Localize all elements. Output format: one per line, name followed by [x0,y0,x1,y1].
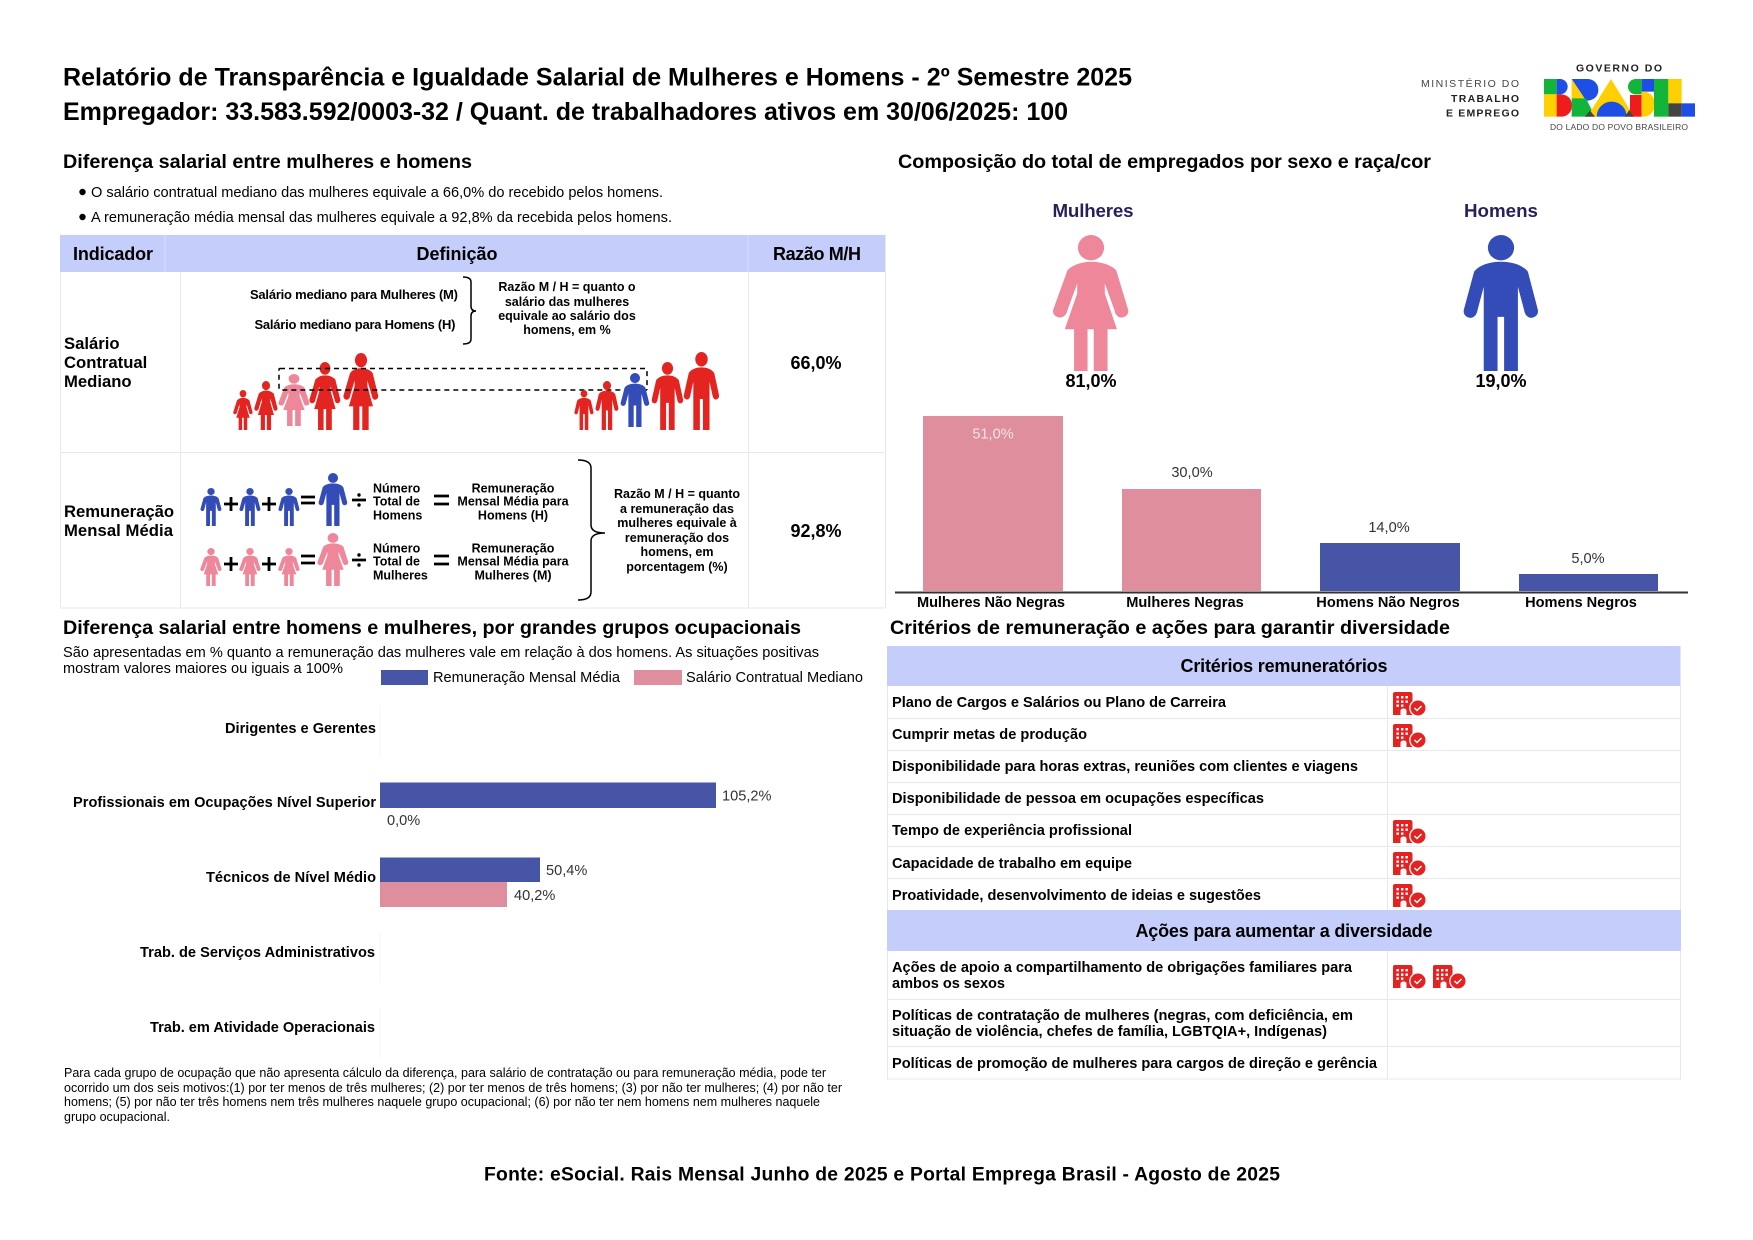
criteria rows: Proatividade, desenvolvimento de ideias e sugestões [892,888,1261,904]
bar chart: grupos ocupacionais: Trab. em Atividade Operacionais [150,1020,375,1036]
chart description [63,645,819,677]
icons: company applies criterion [1393,692,1427,909]
bar chart: grupos ocupacionais [73,705,771,1058]
bar chart: composição por raça/cor: 51,0% [972,426,1014,442]
row label: Mensal Média [64,521,174,540]
panel: men share: Homens [1464,200,1538,221]
panel: women share: Mulheres [1052,200,1134,221]
bar chart: grupos ocupacionais: Trab. de Serviços Administrativos [140,945,375,961]
ratio explanation: equivale ao salário dos [498,309,636,323]
ratio explanation [614,487,740,574]
title: Empregador: 33.583.592/0003-32 / Quant. de trabalhadores ativos em 30/06/2025: 100 [63,98,1068,126]
table header: Definição [416,244,498,264]
bar chart: composição por raça/cor: 5,0% [1571,551,1605,567]
ratio explanation: Razão M / H = quanto o [498,280,636,294]
row label: Remuneração [64,502,174,521]
formula: women: Número [373,542,421,556]
title: Relatório de Transparência e Igualdade Salarial de Mulheres e Homens - 2º Semestre 2025 [63,64,1132,92]
criteria rows: Disponibilidade para horas extras, reuniões com clientes e viagens [892,759,1358,775]
logo: Governo do Brasil: GOVERNO DO [1576,62,1662,74]
action rows: situação de violência, chefes de família, LGBTQIA+, Indígenas) [892,1024,1327,1040]
formula: women: Remuneração [472,542,555,556]
panel: women share [1052,200,1134,391]
panel: women share: 81,0% [1065,371,1117,391]
table: indicadores [60,235,886,608]
bar chart: composição por raça/cor: Homens Negros [1525,595,1637,611]
icon: men ordered by salary [574,352,719,430]
ratio explanation: remuneração dos [625,531,729,545]
criteria rows [892,695,1358,904]
formula: women: Total de [373,554,420,568]
bullet list: summary: A remuneração média mensal das mulheres equivale a 92,8% da recebida pelos homens. [91,210,672,226]
ratio explanation: homens, em % [523,323,611,337]
table header: Indicador [73,244,153,264]
formula: men: Número [373,482,421,496]
formula: women: Mulheres [373,568,428,582]
heading: diferença salarial: Diferença salarial entre mulheres e homens [63,151,472,173]
bullet list: summary: O salário contratual mediano das mulheres equivale a 66,0% do recebido pelos homens. [91,185,663,201]
definition labels: Salário mediano para Homens (H) [254,317,456,332]
footnote: grupo ocupacional. [64,1110,170,1124]
row label [64,502,174,540]
panel: men share: 19,0% [1475,371,1527,391]
section header: critérios remuneratórios [887,646,1681,686]
formula: women: Mensal Média para [457,554,570,568]
bar chart: grupos ocupacionais: 40,2% [514,888,555,904]
median dashed box [279,368,647,390]
logo: Ministério do Trabalho e Emprego: E EMPREGO [1446,108,1519,120]
title [63,64,1132,126]
ratio explanation: homens, em [641,545,713,559]
row: remuneração mensal média [64,460,842,600]
ratio explanation: salário das mulheres [505,295,629,309]
logo: Governo do Brasil: DO LADO DO POVO BRASILEIRO [1550,122,1688,132]
brace [578,460,605,600]
brace [463,277,476,344]
bar chart: composição por raça/cor: 30,0% [1171,465,1213,481]
legend: Salário Contratual Mediano [686,670,863,686]
bar chart: grupos ocupacionais: Profissionais em Ocupações Nível Superior [73,795,376,811]
bar chart: composição por raça/cor: Mulheres Não Negras [917,595,1065,611]
icon: women ordered by salary [233,353,378,430]
action rows: Políticas de promoção de mulheres para cargos de direção e gerência [892,1056,1378,1072]
row: salário contratual mediano [64,277,842,430]
table header: Razão M/H [773,244,861,264]
formula: men: Mensal Média para [457,494,570,508]
footnote [64,1066,842,1124]
criteria rows: Plano de Cargos e Salários ou Plano de Carreira [892,695,1227,711]
chart description: São apresentadas em % quanto a remuneração das mulheres vale em relação à dos homens. As situações positivas [63,645,819,661]
bar chart: grupos ocupacionais: Técnicos de Nível Médio [206,870,376,886]
ratio explanation: a remuneração das [620,502,734,516]
action rows: Políticas de contratação de mulheres (negras, com deficiência, em [892,1008,1353,1024]
ratio explanation: Razão M / H = quanto [614,487,740,501]
action rows: ambos os sexos [892,976,1005,992]
icon: man [1464,235,1538,371]
logo: Ministério do Trabalho e Emprego [1421,77,1519,120]
criteria rows: Tempo de experiência profissional [892,823,1132,839]
bar chart: composição por raça/cor: 14,0% [1368,520,1410,536]
icon: woman [1053,235,1128,371]
legend [381,670,863,686]
formula: men: Homens (H) [478,508,548,522]
footnote: ocorrido um dos seis motivos:(1) por ter menos de três mulheres; (2) por ter menos de três homens; (3) por não ter mulheres; (4) por não ter [64,1081,842,1095]
ratio value: 92,8% [790,521,842,541]
bar chart: grupos ocupacionais: 50,4% [546,863,587,879]
bar chart: grupos ocupacionais: Dirigentes e Gerentes [225,721,376,737]
table: critérios e ações [887,646,1681,1079]
formula: men: Total de [373,494,420,508]
action rows [892,960,1378,1072]
footnote: Para cada grupo de ocupação que não apresenta cálculo da diferença, para salário de contratação ou para remuneração média, pode ter [64,1066,826,1080]
table header [60,235,886,272]
ratio explanation: mulheres equivale à [617,516,737,530]
bar chart: composição por raça/cor: Homens Não Negros [1316,595,1460,611]
formula: men: Homens [373,508,422,522]
row label: Mediano [64,372,132,391]
bullet list: summary [79,185,672,226]
bar chart: composição por raça/cor: Mulheres Negras [1126,595,1244,611]
bar chart: grupos ocupacionais: 105,2% [722,788,771,804]
formula: women [200,533,570,586]
bar chart: composição por raça/cor [895,416,1688,611]
action rows: Ações de apoio a compartilhamento de obrigações familiares para [892,960,1353,976]
row label: Contratual [64,353,147,372]
panel: men share [1464,200,1538,391]
footnote: homens; (5) por não ter três homens nem três mulheres naquele grupo ocupacional; (6) por não ter nem homens nem mulheres naquele [64,1095,820,1109]
icons: company applies action [1393,965,1467,990]
definition labels [250,287,458,332]
formula: women: Mulheres (M) [474,568,552,582]
source: Fonte: eSocial. Rais Mensal Junho de 2025 e Portal Emprega Brasil - Agosto de 2025 [484,1164,1280,1186]
heading: composição: Composição do total de empregados por sexo e raça/cor [898,151,1431,173]
section header: critérios remuneratórios: Critérios remuneratórios [1180,656,1388,676]
formula: men: Remuneração [472,482,555,496]
criteria rows: Disponibilidade de pessoa em ocupações específicas [892,791,1264,807]
formula: men [200,473,570,526]
bar chart: grupos ocupacionais: 0,0% [387,813,420,829]
row label [64,334,147,391]
heading: diferença por grupos ocupacionais: Diferença salarial entre homens e mulheres, por grandes grupos ocupacionais [63,617,801,639]
heading: critérios: Critérios de remuneração e ações para garantir diversidade [890,617,1450,639]
ratio explanation: porcentagem (%) [626,560,728,574]
legend: Remuneração Mensal Média [433,670,621,686]
ratio value: 66,0% [790,353,842,373]
definition labels: Salário mediano para Mulheres (M) [250,287,458,302]
criteria rows: Cumprir metas de produção [892,727,1087,743]
section header: ações [887,910,1681,951]
logo: Ministério do Trabalho e Emprego: MINISTÉRIO DO [1421,77,1519,90]
logo: Ministério do Trabalho e Emprego: TRABALHO [1451,93,1519,105]
criteria rows: Capacidade de trabalho em equipe [892,856,1132,872]
logo: Governo do Brasil [1544,62,1695,132]
section header: ações: Ações para aumentar a diversidade [1136,921,1432,941]
chart description: mostram valores maiores ou iguais a 100% [63,661,343,677]
ratio explanation [498,280,636,337]
row label: Salário [64,334,120,353]
